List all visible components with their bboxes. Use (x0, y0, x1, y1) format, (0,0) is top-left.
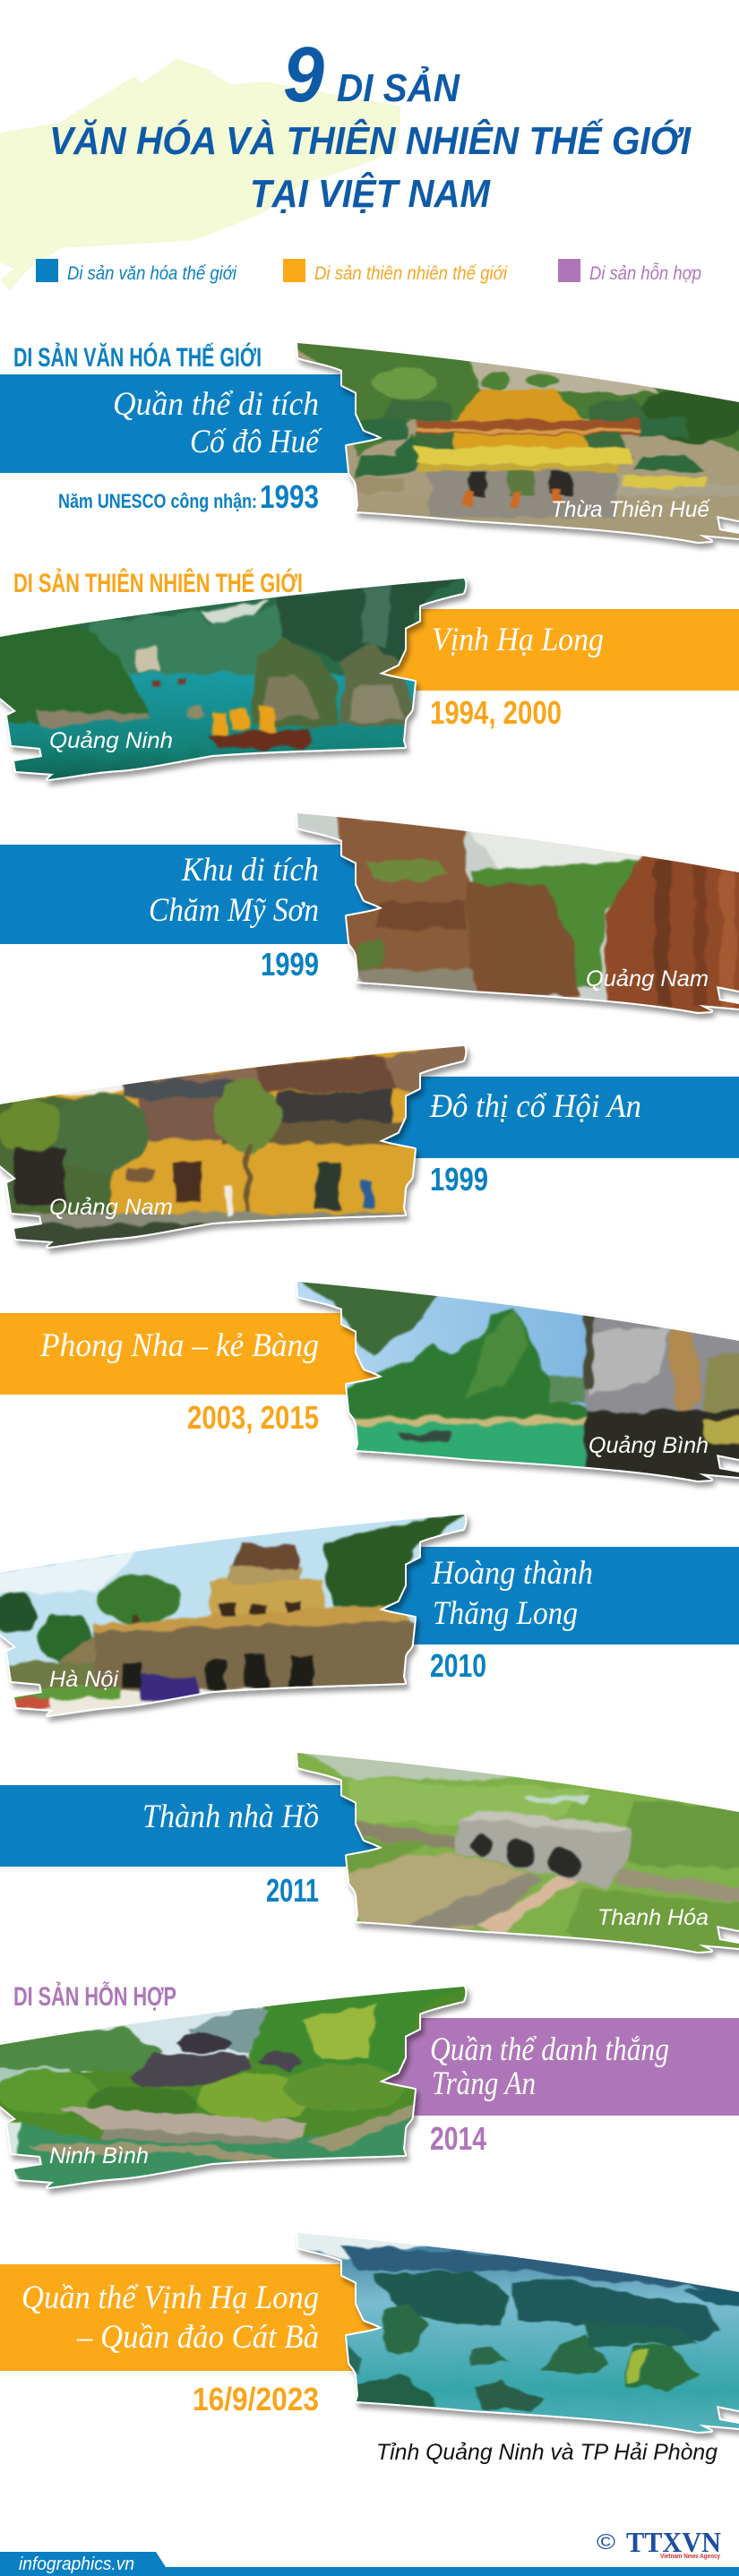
title: Thang Long: Thăng Long (433, 1595, 578, 1632)
recognition year: Hoi An: 1999 (430, 1161, 488, 1198)
location: Quang Ninh: Quảng Ninh (49, 728, 173, 753)
location: Thua Thien Hue: Thừa Thiên Huế (551, 497, 711, 522)
title: Trang An: Tràng An (432, 2065, 536, 2102)
logo: TTXVN: © (597, 2530, 615, 2555)
location: Quang Nam: Quảng Nam (586, 966, 709, 992)
legend (36, 259, 701, 284)
recognition year: Trang An: 2014 (430, 2120, 486, 2157)
location: Ha Noi: Hà Nội (49, 1667, 119, 1692)
title: Trang An: Quần thể danh thắng (430, 2031, 669, 2068)
section heading: world natural heritage: DI SẢN THIÊN NHIÊN THẾ GIỚI (13, 568, 303, 598)
title: Hue (113, 386, 322, 460)
legend: Di sản hỗn hợp (589, 263, 701, 284)
title: Ha Long - Cat Ba (21, 2280, 319, 2356)
title: 9 (283, 31, 324, 118)
recognition year: Thang Long: 2010 (430, 1647, 486, 1684)
title: Trang An (430, 2031, 669, 2102)
title: Thang Long: Hoàng thành (431, 1555, 593, 1592)
title: Ho Citadel: Thành nhà Hồ (142, 1799, 319, 1835)
title: My Son (149, 852, 319, 929)
title: Hoi An: Đô thị cổ Hội An (429, 1088, 641, 1125)
title (49, 31, 692, 216)
recognition year: 1993: Năm UNESCO công nhận: (58, 490, 257, 512)
title: Ha Long - Cat Ba: Quần thể Vịnh Hạ Long (21, 2280, 319, 2316)
title: TẠI VIỆT NAM (250, 171, 491, 216)
recognition year: 1993 (58, 478, 319, 515)
location: Quang Nam: Quảng Nam (49, 1195, 173, 1220)
recognition year: My Son: 1999 (261, 946, 319, 983)
panel: Ho Citadel (0, 1740, 739, 1966)
title: Hue: Quần thể di tích (113, 386, 319, 423)
title: Hue: Cố đô Huế (190, 424, 322, 460)
title: My Son: Chăm Mỹ Sơn (149, 892, 319, 929)
recognition date: 16/9/2023 (193, 2381, 319, 2417)
section heading: world cultural heritage: DI SẢN VĂN HÓA THẾ GIỚI (13, 342, 262, 373)
title: Phong Nha - Ke Bang: Phong Nha – kẻ Bàng (39, 1327, 319, 1364)
logo: TTXVN: TTXVN (626, 2526, 721, 2558)
location: Quang Binh: Quảng Bình (589, 1433, 709, 1458)
background leaf shape (0, 58, 400, 290)
recognition years: Ha Long Bay: 1994, 2000 (430, 694, 562, 731)
title: DI SẢN (337, 65, 460, 110)
title: My Son: Khu di tích (181, 852, 319, 889)
recognition years: Phong Nha: 2003, 2015 (187, 1399, 319, 1436)
location: Ninh Binh: Ninh Bình (49, 2143, 149, 2168)
logo: TTXVN (597, 2526, 721, 2560)
panel: Hue (0, 343, 739, 552)
footer: infographics.vn: infographics.vn (19, 2555, 134, 2574)
legend: Di sản thiên nhiên thế giới (314, 263, 508, 284)
title: VĂN HÓA VÀ THIÊN NHIÊN THẾ GIỚI (49, 118, 692, 163)
panel: Hoi An (0, 1035, 739, 1258)
panel: Ha Long - Cat Ba (0, 2223, 739, 2465)
recognition year: 1993: 1993 (260, 478, 319, 515)
logo: TTXVN: Vietnam News Agency (660, 2554, 720, 2560)
panel: Trang An (0, 1972, 739, 2199)
title: Ha Long - Cat Ba: – Quần đảo Cát Bà (76, 2319, 319, 2356)
location: Thanh Hoa: Thanh Hóa (597, 1905, 709, 1930)
section heading: mixed heritage: DI SẢN HỖN HỢP (13, 1981, 176, 2012)
panel: Ha Long Bay (0, 565, 739, 798)
panel: Phong Nha - Ke Bang (0, 1267, 739, 1494)
panel: Thang Long (0, 1501, 739, 1731)
footer: infographics.vn (0, 2552, 739, 2576)
title: Ha Long Bay: Vịnh Hạ Long (432, 622, 604, 658)
title: Thang Long (431, 1555, 593, 1632)
panel: My Son (0, 813, 739, 1021)
legend: Di sản văn hóa thế giới (67, 263, 237, 284)
location: Quang Ninh and Hai Phong: Tỉnh Quảng Ninh và TP Hải Phòng (376, 2440, 718, 2465)
recognition year: Ho Citadel: 2011 (266, 1872, 319, 1909)
